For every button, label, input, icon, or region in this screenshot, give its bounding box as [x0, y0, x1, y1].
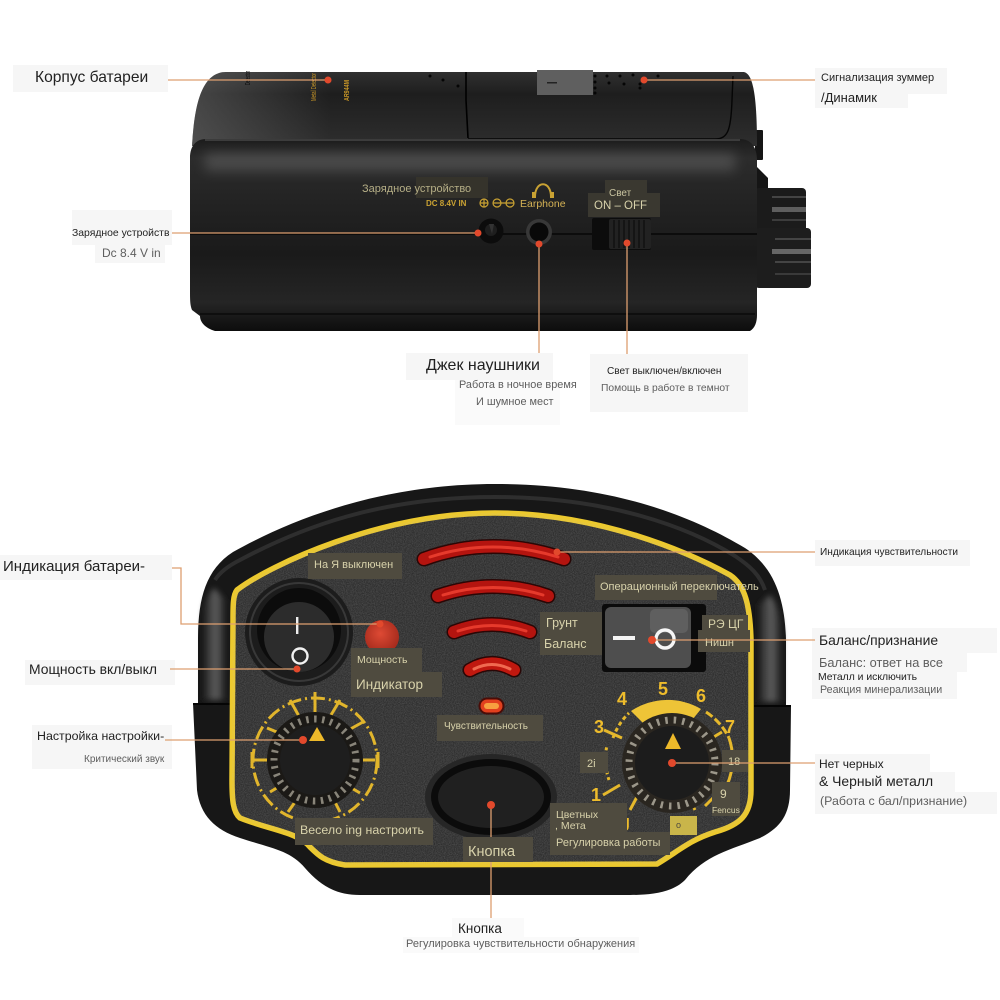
- callout: knob button: Кнопка: [458, 921, 502, 936]
- callout: knob button: Регулировка чувствительности обнаружения: [406, 938, 635, 950]
- light slide switch: [592, 218, 651, 250]
- callout: tune knob: [32, 725, 307, 769]
- callout: earphone jack: [406, 240, 577, 425]
- battery compartment top: [192, 70, 757, 146]
- panel labels: Грунт: [546, 616, 578, 630]
- socket labels on body: Свет: [609, 188, 632, 199]
- housing highlights: [193, 497, 791, 707]
- callout: balance and discrimination: Металл и исключить: [818, 672, 917, 683]
- device side view: [190, 70, 811, 331]
- panel labels: Чувствительность: [444, 721, 528, 732]
- panel labels: Мощность: [357, 654, 408, 666]
- socket labels on body: Зарядное устройство: [362, 183, 471, 195]
- charger socket: [478, 218, 504, 244]
- yellow border and face: [232, 513, 751, 865]
- knobs on the side: [755, 130, 811, 288]
- callout: charger: Dc 8.4 V in: [102, 246, 161, 260]
- callout: ferrous and non-ferrous: & Черный металл: [819, 773, 933, 789]
- panel labels: Регулировка работы: [556, 837, 661, 849]
- dial numbers: 5: [658, 679, 668, 699]
- socket labels on body: ON – OFF: [594, 200, 647, 212]
- battery compartment top: Detector: [245, 71, 252, 85]
- dial numbers: J: [620, 815, 630, 835]
- panel labels: 18: [728, 756, 740, 768]
- power LED: [365, 620, 399, 654]
- callout: earphone jack: Джек наушники: [426, 357, 540, 374]
- panel labels: 9: [720, 787, 727, 801]
- callout: ferrous and non-ferrous: (Работа с бал/признание): [820, 794, 967, 808]
- callout: earphone jack: И шумное мест: [476, 396, 554, 408]
- main body: [190, 139, 757, 331]
- callout: charger: Зарядное устройств: [72, 228, 170, 239]
- callout: power switch: Мощность вкл/выкл: [29, 661, 157, 677]
- callout: balance and discrimination: Реакция минерализации: [820, 684, 942, 696]
- callout: balance and discrimination: [648, 628, 997, 699]
- tune dial: [252, 692, 378, 822]
- dial numbers: 1: [591, 785, 601, 805]
- callout: battery indicator: Индикация батареи-: [3, 558, 145, 575]
- panel labels: Цветных: [556, 809, 599, 821]
- callout: balance and discrimination: Баланс/признание: [819, 632, 938, 648]
- panel labels: Нишн: [705, 637, 734, 649]
- callout: battery indicator: [0, 555, 384, 628]
- dial numbers: 4: [617, 689, 627, 709]
- callout: charger: [72, 210, 482, 263]
- callout: buzzer: [640, 68, 947, 108]
- callout: ferrous and non-ferrous: Нет черных: [819, 757, 884, 771]
- panel labels: 2i: [587, 758, 596, 770]
- power rocker: [245, 578, 353, 686]
- socket labels on body: DC 8.4V IN: [426, 199, 467, 208]
- callout: ferrous and non-ferrous: [668, 754, 997, 814]
- dial numbers: [591, 679, 735, 835]
- callout: earphone jack: Работа в ночное время: [459, 379, 577, 391]
- callout: buzzer: /Динамик: [821, 90, 877, 105]
- socket labels on body: Earphone: [520, 198, 566, 210]
- dial numbers: 3: [594, 717, 604, 737]
- callout: tune knob: Критический звук: [84, 754, 165, 765]
- callout: buzzer: Сигнализация зуммер: [821, 72, 934, 84]
- panel labels: Fencus: [712, 805, 740, 815]
- callout: light switch: [590, 240, 748, 412]
- outer housing: [193, 484, 791, 895]
- callout: battery case: Корпус батареи: [35, 69, 148, 86]
- sensitivity bars: [424, 546, 564, 706]
- search button: [425, 754, 557, 840]
- panel labels: Весело ing настроить: [300, 823, 424, 837]
- panel labels: , Мета: [555, 820, 586, 832]
- callout: tune knob: Настройка настройки-: [37, 729, 164, 743]
- panel labels: Индикатор: [356, 677, 423, 692]
- callout: light switch: Помощь в работе в темнот: [601, 382, 730, 394]
- panel labels: о: [676, 820, 681, 830]
- battery compartment top: Metal Detector: [311, 73, 318, 101]
- discrimination dial: [603, 700, 733, 813]
- panel labels: Баланс: [544, 637, 587, 651]
- battery compartment top: AR944M: [344, 80, 351, 101]
- callout: balance and discrimination: Баланс: ответ на все: [819, 655, 943, 670]
- callout: knob button: [403, 801, 639, 953]
- dial numbers: 6: [696, 686, 706, 706]
- panel labels: РЭ ЦГ: [708, 617, 744, 631]
- earphone jack: [526, 219, 552, 245]
- socket labels on body: [362, 177, 660, 217]
- control panel: [193, 484, 791, 895]
- operating switch: [602, 604, 706, 672]
- callout: sensitivity indication: [554, 540, 970, 566]
- panel labels: На Я выключен: [314, 559, 393, 571]
- callout: light switch: Свет выключен/включен: [607, 366, 721, 377]
- panel labels: [295, 553, 759, 862]
- dial numbers: 7: [725, 717, 735, 737]
- callout: battery case: [13, 65, 332, 92]
- callout: power switch: [25, 660, 300, 685]
- callout: sensitivity indication: Индикация чувствительности: [820, 547, 958, 558]
- panel labels: Кнопка: [468, 844, 516, 860]
- panel labels: Операционный переключатель: [600, 581, 759, 593]
